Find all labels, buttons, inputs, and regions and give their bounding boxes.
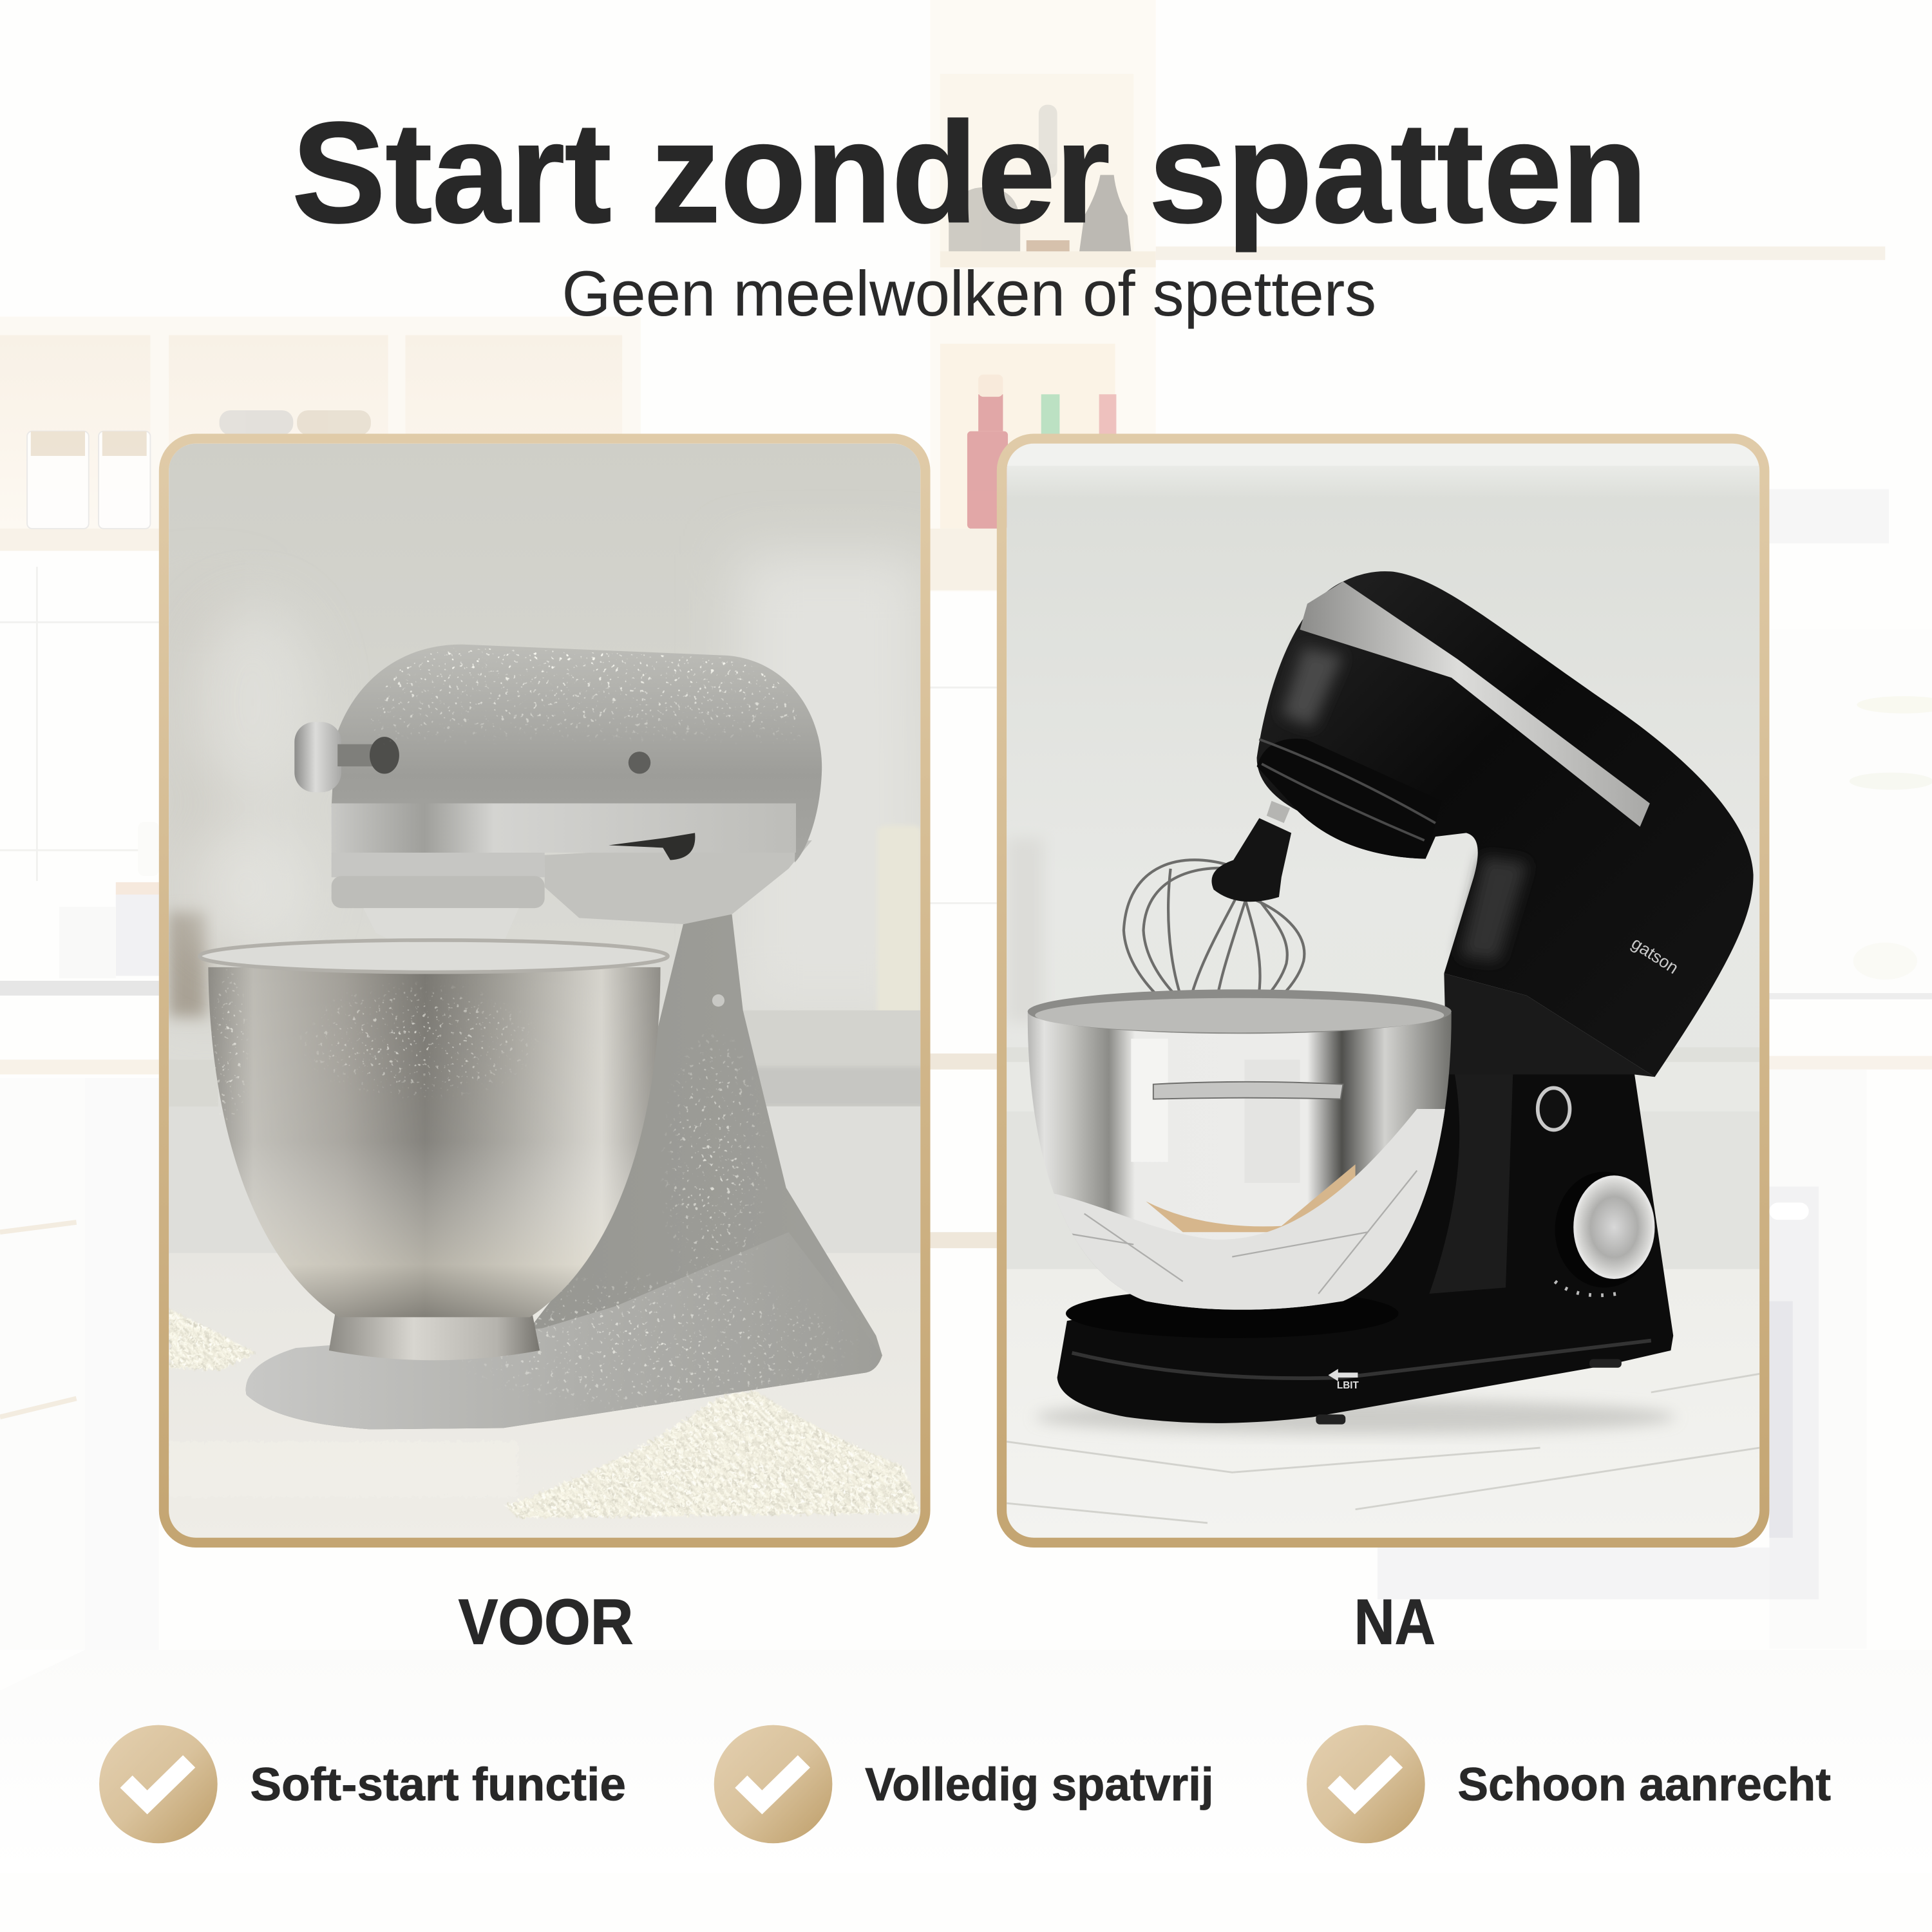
icon: black mixer head — [1257, 571, 1754, 1077]
benefit: soft-start — [99, 1725, 626, 1843]
icon: black mixer body — [1057, 973, 1673, 1425]
benefit: spatvrij: Volledig spatvrij — [865, 1758, 1214, 1810]
label: na: NA — [1354, 1586, 1435, 1658]
backdrop: voor kitchen — [169, 444, 924, 1540]
benefit: aanrecht: Schoon aanrecht — [1457, 1758, 1831, 1810]
label: voor: VOOR — [459, 1586, 633, 1658]
icon: steel bowl — [200, 940, 668, 1360]
icon: whisk — [1122, 801, 1306, 992]
icon: check — [1307, 1725, 1425, 1843]
icon: lift label — [1328, 1369, 1359, 1391]
icon: black mixer head: gatson — [1628, 933, 1682, 978]
icon: check — [99, 1725, 218, 1843]
backdrop: na kitchen — [1007, 444, 1759, 1540]
icon: check — [714, 1725, 832, 1843]
panel: voor photo — [164, 439, 925, 1542]
benefit: aanrecht — [1307, 1725, 1831, 1843]
icon: tilt button — [1538, 1088, 1570, 1130]
icon: lift label: LBIT — [1337, 1380, 1359, 1391]
icon: flour cloud — [185, 604, 314, 955]
panel: na photo — [1001, 439, 1765, 1542]
icon: chrome bowl — [1023, 989, 1454, 1338]
icon: flour piles — [169, 1309, 920, 1518]
icon: flour mixer body — [246, 645, 882, 1429]
frame: na — [1001, 439, 1765, 1542]
title: Start zonder spatten — [292, 93, 1647, 252]
subtitle: Geen meelwolken of spetters — [562, 258, 1376, 330]
benefit: spatvrij — [714, 1725, 1214, 1843]
icon: speed dial — [1555, 1172, 1654, 1295]
frame: voor — [164, 439, 925, 1542]
benefit: soft-start: Soft-start functie — [250, 1758, 626, 1810]
